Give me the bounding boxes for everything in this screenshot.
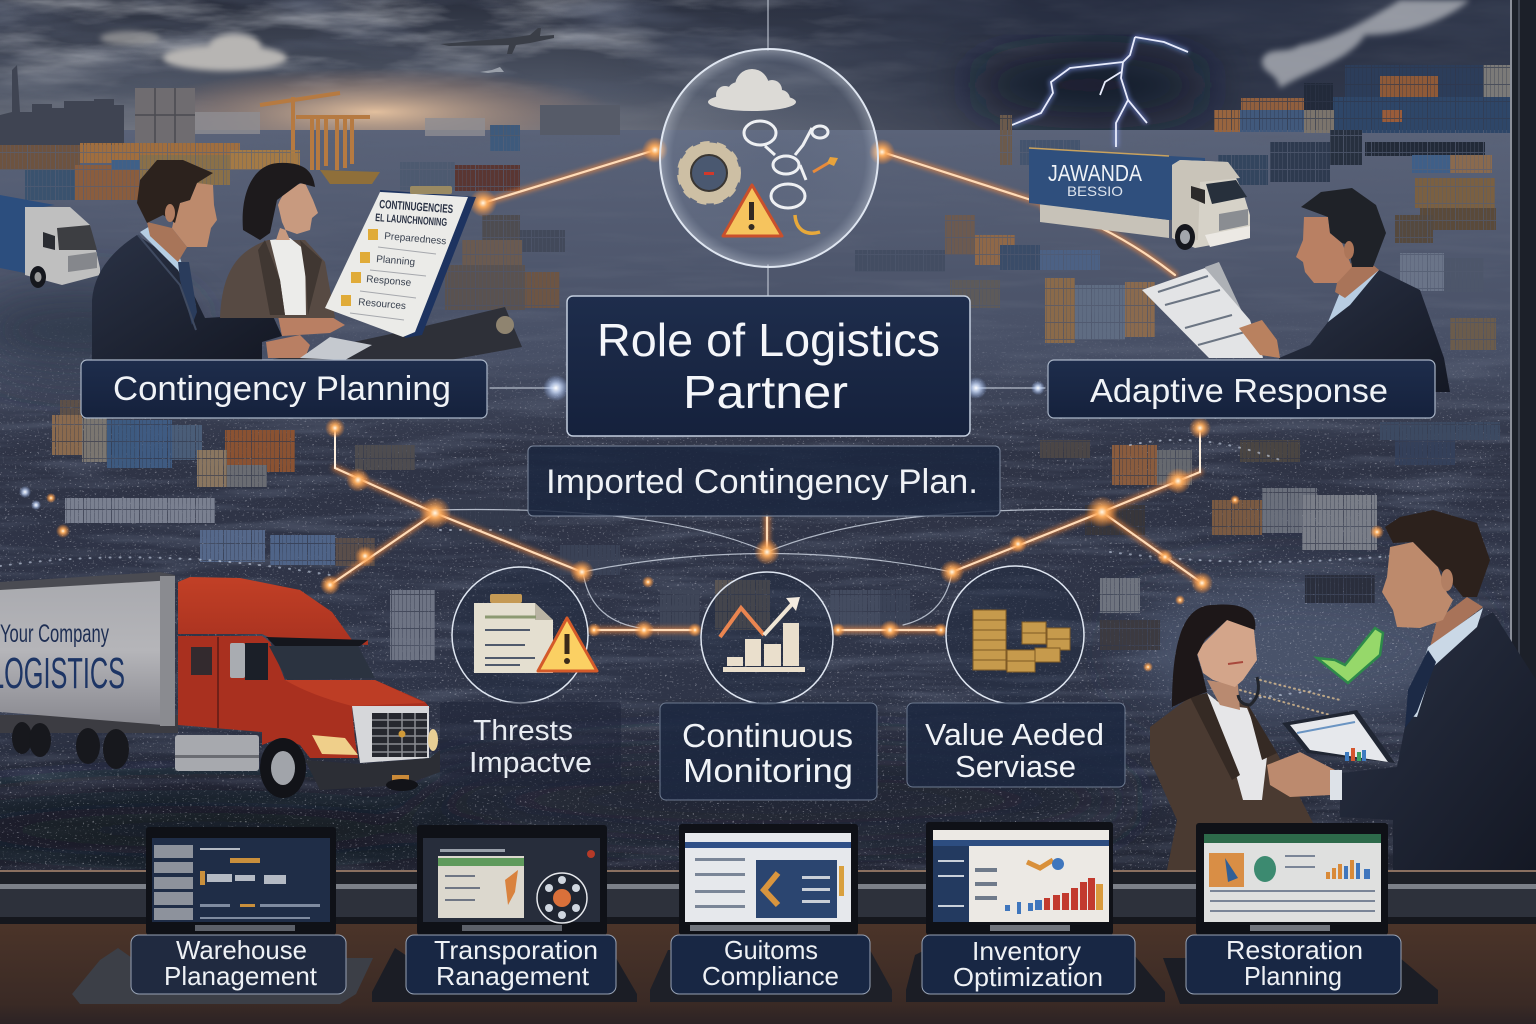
label: transportation management: Transporation (434, 935, 598, 965)
trailer (0, 572, 178, 769)
person: man with tablet, bottom right (1267, 510, 1536, 870)
red semi truck with logistics trailer (0, 572, 440, 798)
small white truck at left (0, 195, 100, 288)
panel: title: Partner (683, 366, 848, 418)
panel: continuous monitoring: Monitoring (683, 752, 853, 789)
panel: continuous monitoring: Continuous (682, 717, 853, 754)
distant skyline and crane (0, 65, 620, 184)
label: customs compliance: Guitoms (724, 935, 818, 965)
label: inventory optimization: Inventory (972, 936, 1081, 966)
laptop bases (72, 948, 1438, 1004)
panel: adaptive response: Adaptive Response (1090, 372, 1388, 409)
circle: value added gold stacks icon (946, 566, 1084, 704)
label: warehouse management: Planagement (164, 961, 318, 991)
icon: clipboard document: Response (366, 274, 412, 289)
person: woman in suit, top left (220, 163, 357, 318)
panel: contingency planning: Contingency Planning (113, 370, 451, 408)
label: transportation management: Ranagement (436, 961, 590, 991)
container stacks (0, 65, 1510, 660)
label: customs compliance (671, 935, 870, 994)
laptop: inventory optimization (926, 822, 1113, 935)
label: threats impact: Impactve (469, 747, 592, 779)
circle: threats icon (452, 567, 597, 703)
desk with keyboard, top left (270, 307, 522, 360)
icon: clipboard document: Planning (376, 254, 415, 268)
label: inventory optimization: Optimization (953, 962, 1103, 992)
icon: clipboard document: Preparedness (384, 231, 447, 247)
panel: contingency planning (81, 360, 487, 418)
label: warehouse management: Warehouse (176, 935, 307, 965)
icon: green check mark (1317, 628, 1383, 683)
network glowing nodes (19, 137, 1384, 672)
tractor cab (175, 577, 440, 798)
blue delivery truck with white cab (1029, 148, 1250, 250)
panel: continuous monitoring (660, 703, 877, 800)
laptop: warehouse management (146, 827, 336, 935)
person: man with documents, top right (1142, 188, 1450, 392)
panel: imported contingency plan: Imported Contingency Plan. (546, 463, 978, 501)
lightning bolts (1012, 37, 1188, 147)
label: warehouse management (131, 935, 346, 994)
icon: clipboard document: EL LAUNCHNONING (375, 212, 447, 229)
icon: warning triangle (723, 185, 782, 236)
icon: gear (680, 144, 738, 202)
label: transportation management (406, 935, 616, 994)
panel: imported contingency plan (528, 446, 1000, 516)
smoke plume (1262, 0, 1470, 88)
icon: clipboard document (325, 186, 476, 338)
panel: value added service: Value Aeded (925, 717, 1104, 752)
label: threats impact (440, 702, 621, 786)
blue delivery truck with white cab: BESSIO (1067, 183, 1123, 199)
icon: network loop (744, 121, 828, 208)
panel: adaptive response (1048, 360, 1435, 418)
icon: cloud (708, 69, 796, 111)
laptop: restoration planning (1196, 823, 1388, 935)
label: restoration planning (1186, 935, 1401, 994)
laptop: transportation management (417, 825, 607, 935)
icon: clipboard document: CONTINUGENCIES (379, 197, 454, 216)
label: inventory optimization (922, 935, 1135, 994)
panel: value added service (907, 703, 1125, 787)
background: logistics yard ground (0, 130, 1536, 880)
label: threats impact: Thrests (473, 715, 573, 747)
laptop keyboard, top left (300, 337, 372, 360)
panel: title: Role of Logistics (597, 314, 940, 366)
right window frame (1510, 0, 1536, 870)
icon: clipboard document: Resources (358, 297, 406, 312)
label: restoration planning: Planning (1244, 961, 1342, 991)
icon: phone (795, 215, 820, 233)
trailer: Your Company (0, 620, 109, 648)
airplane and drone (440, 28, 554, 73)
person: man in suit, top left (92, 160, 345, 360)
circle: monitoring chart icon (701, 572, 833, 704)
panel: value added service: Serviase (955, 749, 1076, 784)
panel: title (567, 296, 970, 436)
background: stormy sky (0, 0, 1510, 130)
laptop: customs compliance (679, 824, 858, 935)
circle: top contingency icons (660, 49, 878, 267)
label: restoration planning: Restoration (1226, 935, 1363, 965)
desk and window sill (0, 870, 1536, 1024)
light strings across the yard (0, 440, 1400, 715)
blue delivery truck with white cab: JAWANDA (1048, 160, 1143, 186)
label: customs compliance: Compliance (702, 961, 839, 991)
network lines (330, 0, 1202, 630)
person: woman with headset, bottom right (1150, 604, 1320, 870)
